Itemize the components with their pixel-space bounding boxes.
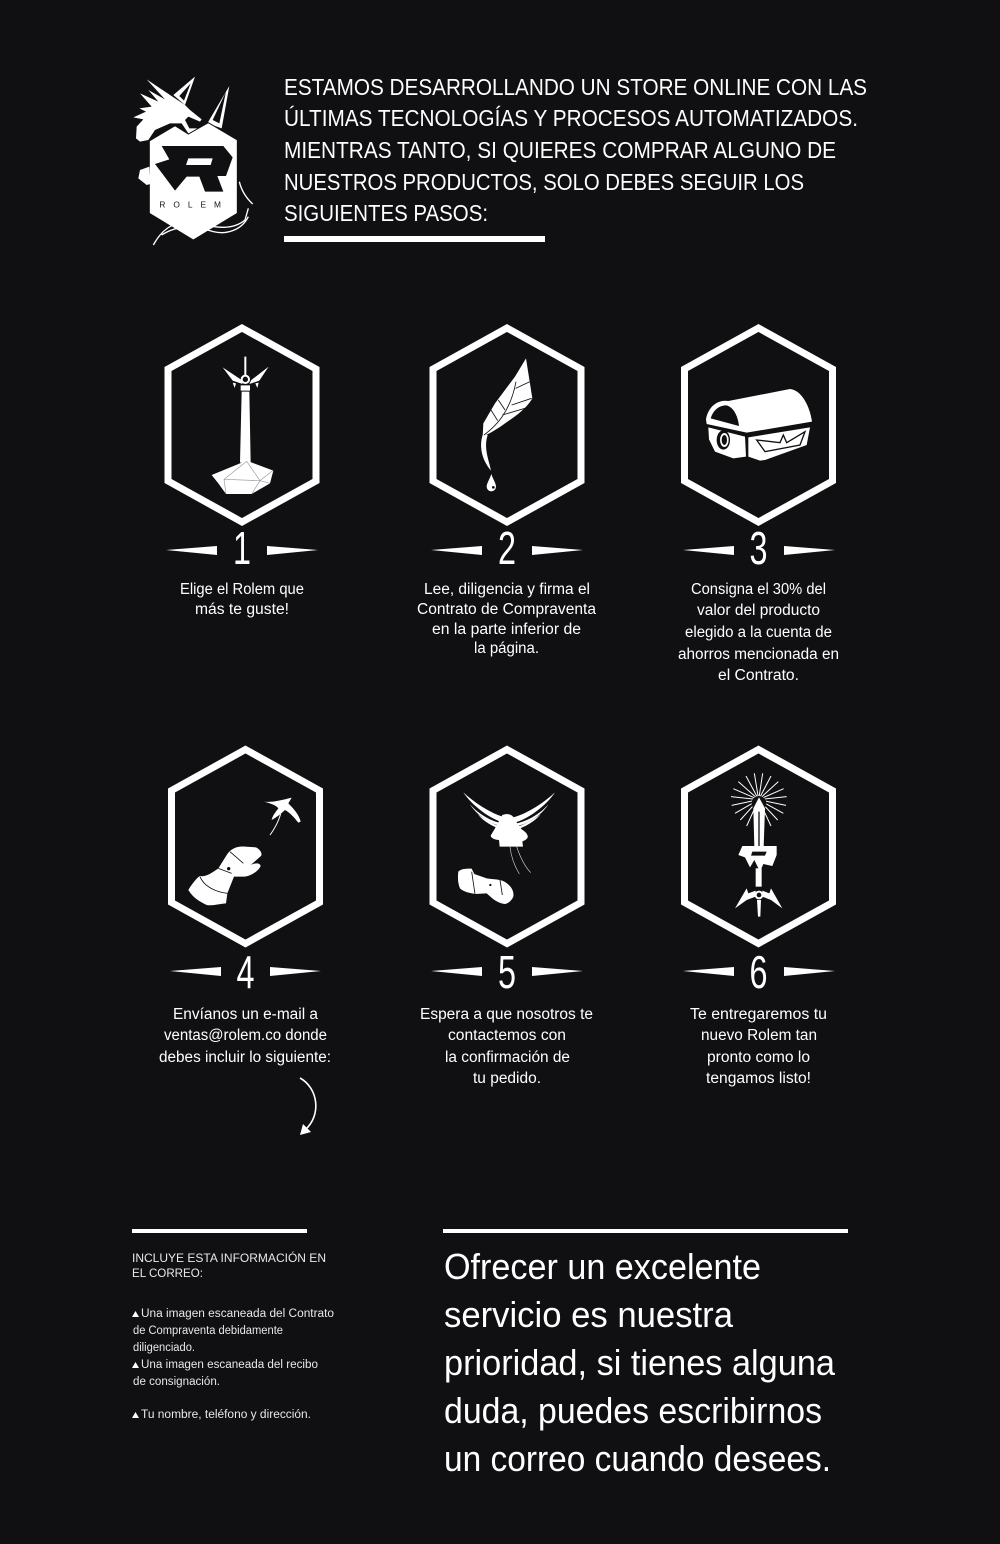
divider wedges 1 [166, 546, 318, 555]
divider wedges 5 [431, 967, 583, 976]
hexagon 6 [684, 750, 832, 944]
panel: step 5 [420, 750, 593, 1087]
panel: step 4 [159, 750, 331, 1135]
step 3 text: valor del producto [697, 602, 820, 619]
closing statement [444, 1246, 836, 1479]
closing statement: Ofrecer un excelente [444, 1246, 761, 1287]
checklist heading: EL CORREO: [132, 1268, 203, 1280]
checklist items [133, 1308, 334, 1421]
checklist items: Una imagen escaneada del recibo [141, 1359, 318, 1371]
intro paragraph: ESTAMOS DESARROLLANDO UN STORE ONLINE CON LAS [284, 74, 867, 100]
number 4: 4 [236, 946, 254, 998]
intro paragraph: ÚLTIMAS TECNOLOGÍAS Y PROCESOS AUTOMATIZADOS. [284, 105, 858, 131]
hexagon 5 [433, 750, 581, 944]
closing statement: duda, puedes escribirnos [444, 1390, 822, 1431]
step 5 text: tu pedido. [473, 1070, 541, 1087]
intro paragraph: MIENTRAS TANTO, SI QUIERES COMPRAR ALGUNO DE [284, 137, 836, 163]
step 3 text: el Contrato. [718, 667, 799, 684]
divider wedges 4 [170, 967, 321, 976]
step 2 text: Lee, diligencia y firma el [424, 581, 590, 598]
icon: treasure chest [706, 389, 812, 461]
checklist rule [132, 1229, 307, 1233]
panel: step 2 [417, 328, 596, 657]
icon: gauntlet releasing bird [188, 798, 301, 905]
checklist items: de Compraventa debidamente [133, 1325, 283, 1337]
step 5 text: la confirmación de [445, 1049, 570, 1066]
intro paragraph: NUESTROS PRODUCTOS, SOLO DEBES SEGUIR LOS [284, 169, 804, 195]
panel: step 1 [166, 328, 318, 618]
step 5 text [420, 1006, 593, 1087]
step 4 text: ventas@rolem.co donde [164, 1027, 327, 1044]
checklist items: diligenciado. [133, 1342, 195, 1354]
closing statement: prioridad, si tienes alguna [444, 1342, 836, 1383]
step 5 text: contactemos con [448, 1027, 566, 1044]
checklist items: Una imagen escaneada del Contrato [141, 1308, 334, 1320]
bullet markers [132, 1311, 139, 1418]
step 3 text [678, 581, 839, 684]
step 6 text: nuevo Rolem tan [701, 1027, 817, 1044]
arrow [300, 1078, 316, 1135]
number 5: 5 [498, 946, 516, 998]
hexagon 2 [433, 328, 581, 522]
panel: closing message [443, 1229, 848, 1479]
logo: Rolem dragon and shield [133, 77, 253, 245]
divider wedges 6 [683, 967, 835, 976]
icon: bird and open gauntlet [458, 792, 555, 904]
step 6 text: Te entregaremos tu [690, 1006, 827, 1023]
closing statement: un correo cuando desees. [444, 1438, 831, 1479]
step 1 text [180, 581, 304, 618]
intro paragraph: SIGUIENTES PASOS: [284, 200, 488, 226]
step 3 text: elegido a la cuenta de [685, 624, 832, 641]
step 3 text: ahorros mencionada en [678, 646, 839, 663]
checklist items: Tu nombre, teléfono y dirección. [141, 1409, 311, 1421]
number 6: 6 [750, 946, 768, 998]
closing statement: servicio es nuestra [444, 1294, 734, 1335]
icon: sword in stone [212, 357, 273, 494]
icon: glowing sword with R [731, 773, 787, 917]
panel: step 6 [683, 750, 835, 1087]
checklist heading [132, 1252, 326, 1280]
step 4 text [159, 1006, 331, 1066]
step 6 text [690, 1006, 827, 1087]
step 2 text [417, 581, 596, 657]
hexagon 1 [168, 328, 316, 522]
step 4 text: debes incluir lo siguiente: [159, 1049, 331, 1066]
heading underline [284, 236, 545, 242]
number 3: 3 [750, 522, 768, 574]
step 2 text: la página. [474, 640, 539, 657]
step 3 text: Consigna el 30% del [691, 581, 826, 598]
hexagon 4 [172, 750, 320, 944]
divider wedges 2 [431, 546, 583, 555]
panel: email checklist [132, 1229, 334, 1421]
logo: Rolem dragon and shield: ROLEM [159, 199, 229, 209]
number 1: 1 [233, 522, 251, 574]
checklist heading: INCLUYE ESTA INFORMACIÓN EN [132, 1252, 326, 1265]
step 2 text: en la parte inferior de [432, 621, 581, 638]
number 2: 2 [498, 522, 516, 574]
hexagon 3 [684, 328, 832, 522]
divider wedges 3 [683, 546, 835, 555]
panel: step 3 [678, 328, 839, 684]
closing rule [443, 1229, 848, 1233]
checklist items: de consignación. [133, 1376, 220, 1388]
intro paragraph [284, 74, 867, 226]
step 1 text: más te guste! [195, 601, 289, 618]
step 5 text: Espera a que nosotros te [420, 1006, 593, 1023]
step 4 text: Envíanos un e-mail a [173, 1006, 318, 1023]
icon: quill and ink drop [481, 358, 532, 491]
step 6 text: pronto como lo [707, 1049, 810, 1066]
step 2 text: Contrato de Compraventa [417, 601, 596, 618]
step 1 text: Elige el Rolem que [180, 581, 304, 598]
step 6 text: tengamos listo! [706, 1070, 811, 1087]
